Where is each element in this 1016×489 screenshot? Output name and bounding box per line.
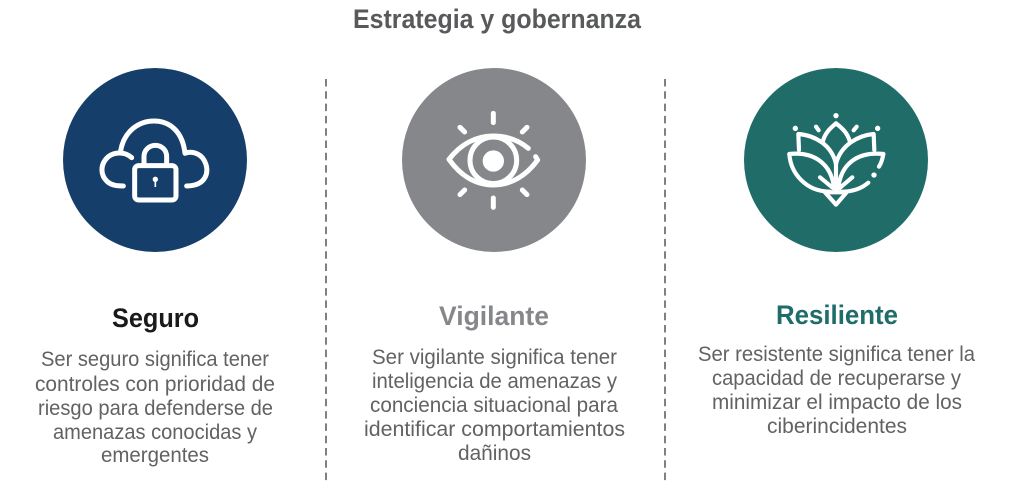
text block: resiliente: ciberincidentes [767, 415, 907, 438]
text block: seguro [35, 348, 275, 467]
text block: vigilante: conciencia situacional para [370, 394, 618, 417]
heading: seguro: Seguro [112, 303, 199, 333]
text block: seguro: Ser seguro significa tener [41, 348, 269, 371]
icon: cloud with padlock [63, 68, 247, 252]
text block: seguro: emergentes [101, 444, 209, 467]
text block: resiliente [698, 343, 975, 438]
heading: resiliente: Resiliente [776, 300, 898, 330]
text block: vigilante: identificar comportamientos [364, 418, 625, 441]
text block: seguro: controles con prioridad de [35, 373, 275, 396]
icon: eye [402, 68, 586, 252]
panel: vigilante [364, 68, 625, 465]
text block: vigilante [364, 346, 625, 465]
text block: resiliente: Ser resistente significa tener la [698, 343, 975, 366]
text block: vigilante: inteligencia de amenazas y [372, 370, 617, 393]
title: Estrategia y gobernanza [353, 4, 641, 34]
icon: lotus flower [744, 68, 928, 252]
text block: vigilante: Ser vigilante significa tener [372, 346, 617, 369]
text block: seguro: riesgo para defenderse de [38, 397, 273, 420]
text block: seguro: amenazas conocidas y [53, 421, 257, 444]
text block: resiliente: minimizar el impacto de los [712, 391, 962, 414]
panel: resiliente [698, 68, 975, 438]
text block: vigilante: dañinos [458, 442, 531, 465]
heading: vigilante: Vigilante [439, 301, 549, 331]
panel: seguro [35, 68, 275, 467]
text block: resiliente: capacidad de recuperarse y [712, 367, 961, 390]
